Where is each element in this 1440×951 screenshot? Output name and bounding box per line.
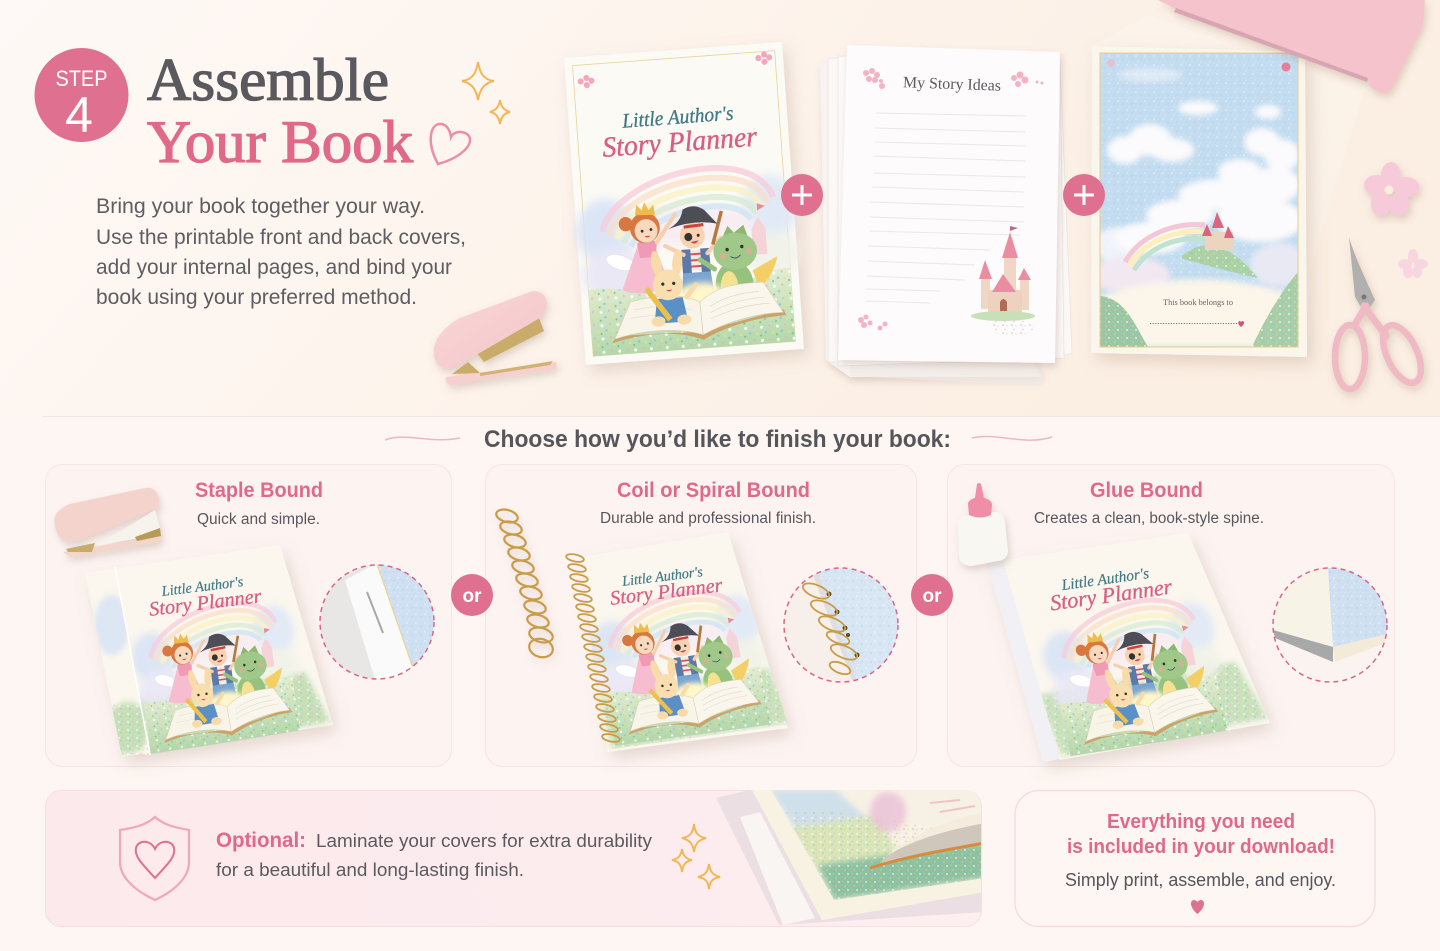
panel: glue bound bbox=[948, 464, 1395, 766]
story ideas page: My Story Ideas bbox=[903, 74, 1001, 95]
title bbox=[147, 47, 413, 175]
icon: stapler bbox=[54, 488, 162, 557]
icon: stapler bbox=[434, 291, 557, 385]
glue bound book: Little Author's bbox=[1060, 565, 1150, 594]
text: staple description: Quick and simple. bbox=[197, 511, 320, 528]
icon: loose coil bbox=[495, 507, 555, 660]
staple bound book: Little Author's bbox=[160, 574, 245, 600]
text: glue description: Creates a clean, book-style spine. bbox=[1034, 510, 1264, 527]
heading: staple bound: Staple Bound bbox=[195, 479, 323, 502]
callout: everything included bbox=[1015, 790, 1375, 926]
step badge bbox=[34, 48, 128, 143]
or badge: or bbox=[922, 586, 942, 607]
spiral binding bbox=[565, 553, 621, 743]
title: Your Book bbox=[147, 109, 413, 175]
plus sign bbox=[1063, 174, 1105, 216]
icon: sparkles bbox=[672, 824, 720, 889]
text: optional note: Laminate your covers for extra durability bbox=[316, 830, 653, 851]
panel: coil or spiral bound bbox=[486, 464, 916, 766]
internal pages stack bbox=[820, 56, 1072, 386]
back cover text: This book belongs to bbox=[1163, 297, 1233, 307]
front cover bbox=[564, 42, 807, 365]
staple bound book bbox=[88, 550, 340, 768]
or badge: or bbox=[462, 586, 482, 607]
icon: small flower bbox=[1398, 249, 1428, 278]
or badge bbox=[451, 574, 493, 616]
text: optional note: for a beautiful and long-lasting finish. bbox=[216, 859, 524, 880]
heading: coil bound: Coil or Spiral Bound bbox=[617, 479, 810, 502]
icon: shield with heart bbox=[120, 817, 189, 900]
coil bound book: Little Author's bbox=[620, 564, 704, 590]
laminated book photo bbox=[716, 788, 985, 925]
text: coil description: Durable and professional finish. bbox=[600, 510, 816, 527]
story ideas page bbox=[838, 45, 1060, 363]
detail: glue close-up bbox=[1272, 567, 1388, 683]
title: Assemble bbox=[147, 47, 389, 113]
section heading: Choose how you’d like to finish your book: bbox=[484, 426, 951, 453]
coil bound book bbox=[584, 537, 794, 762]
intro text: book using your preferred method. bbox=[96, 286, 417, 309]
icon: large flower bbox=[1364, 162, 1419, 216]
glue bound book: Story Planner bbox=[1048, 574, 1174, 616]
intro text: Bring your book together your way. bbox=[96, 195, 425, 218]
front cover: Little Author's bbox=[621, 102, 734, 133]
text: optional note: Optional: bbox=[216, 829, 306, 852]
or badge bbox=[911, 574, 953, 616]
back cover text bbox=[1150, 297, 1244, 327]
back cover bbox=[1090, 46, 1310, 357]
step badge: STEP bbox=[56, 66, 108, 91]
icon: sparkles bbox=[462, 62, 510, 124]
intro text: add your internal pages, and bind your bbox=[96, 256, 452, 279]
plus sign bbox=[781, 174, 823, 216]
coil bound book: Story Planner bbox=[609, 574, 724, 610]
heading: glue bound: Glue Bound bbox=[1090, 479, 1203, 502]
intro text bbox=[96, 195, 466, 309]
icon: laminator bbox=[1158, 0, 1425, 93]
callout: everything included: Simply print, assemble, and enjoy. bbox=[1065, 870, 1336, 890]
step badge: 4 bbox=[65, 87, 93, 143]
callout: everything included: Everything you need bbox=[1107, 811, 1295, 833]
icon: heart bbox=[1191, 900, 1204, 914]
front cover: Story Planner bbox=[601, 121, 759, 164]
panel: optional lamination bbox=[46, 788, 985, 926]
panel: staple bound bbox=[46, 464, 452, 766]
intro text: Use the printable front and back covers, bbox=[96, 226, 466, 249]
glue bound book bbox=[987, 503, 1270, 762]
laminating sheet bbox=[1092, 15, 1365, 357]
icon: glue bottle bbox=[958, 483, 1008, 566]
callout: everything included: is included in your download! bbox=[1067, 836, 1335, 858]
staple bound book: Story Planner bbox=[148, 585, 263, 621]
icon: scissors bbox=[1335, 237, 1429, 389]
detail: coil close-up bbox=[783, 567, 899, 683]
detail: staple close-up bbox=[319, 564, 435, 680]
text: optional note bbox=[216, 829, 653, 880]
icon: heart outline bbox=[431, 124, 470, 164]
